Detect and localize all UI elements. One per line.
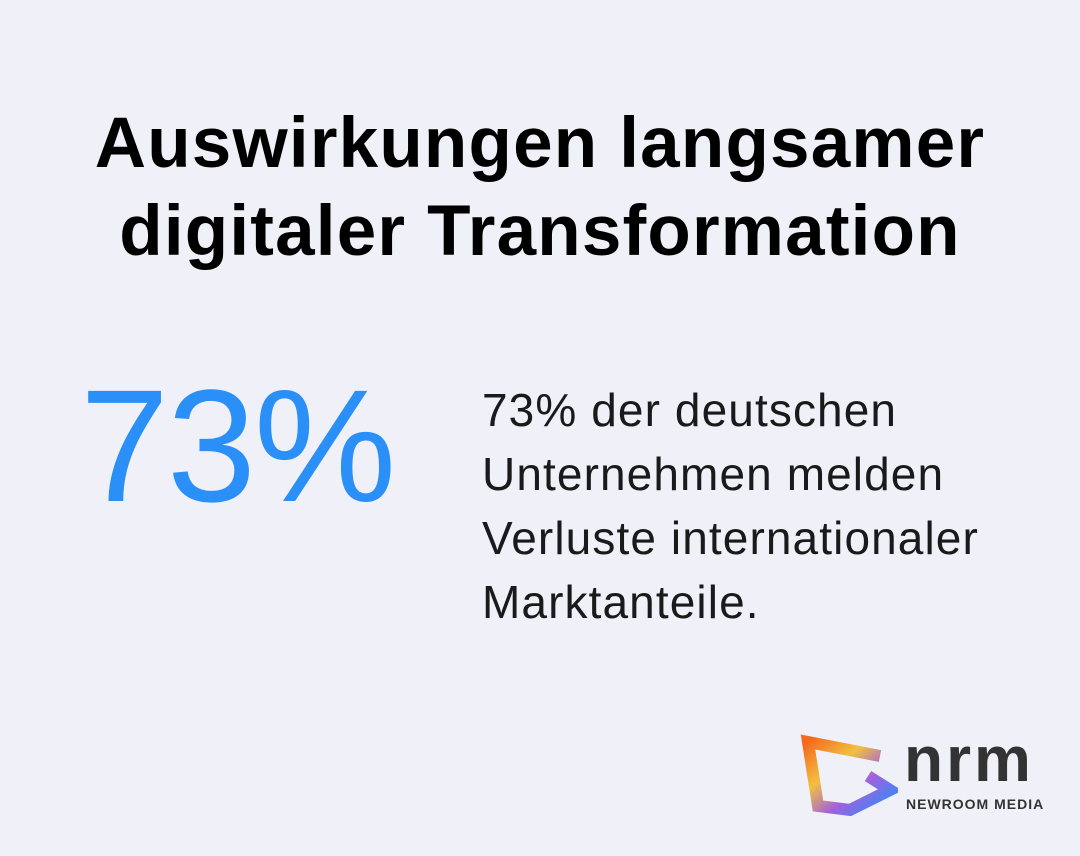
description text <box>482 384 979 628</box>
logo: NEWROOM MEDIA <box>906 796 1044 812</box>
icon: logo mark <box>800 734 898 816</box>
big stat number: 73% <box>80 356 394 535</box>
description text: Marktanteile. <box>482 576 760 628</box>
logo <box>800 723 1044 816</box>
description text: Unternehmen melden <box>482 448 944 500</box>
title: Auswirkungen langsamer <box>95 104 985 183</box>
description text: Verluste internationaler <box>482 512 979 564</box>
logo text: nrm <box>904 723 1034 795</box>
title: digitaler Transformation <box>119 192 961 271</box>
title <box>95 104 985 271</box>
description text: 73% der deutschen <box>482 384 897 436</box>
